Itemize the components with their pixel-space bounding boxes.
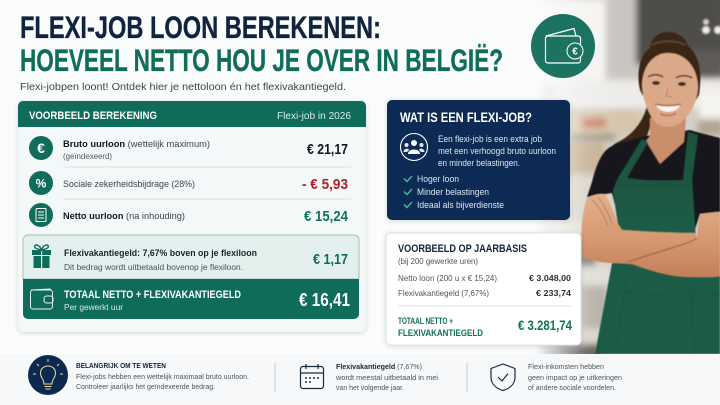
panel header: VOORBEELD BEREKENING: [29, 110, 157, 122]
ponytail: [607, 106, 652, 162]
footer item: flexi-inkomsten: Flexi-inkomsten hebben: [528, 362, 604, 371]
apron bib: [613, 132, 698, 240]
row: netto uurloon: Netto uurloon (na inhouding): [63, 211, 185, 222]
icon: shield: [491, 364, 515, 390]
footer item: flexivakantiegeld: wordt meestal uitbetaald in mei: [335, 373, 438, 382]
row: sociale zekerheidsbijdrage: - € 5,93: [302, 177, 348, 193]
footer item: flexivakantiegeld: van het volgende jaar.: [336, 383, 404, 392]
panel: voorbeeld op jaarbasis: (bij 200 gewerkte uren): [398, 257, 478, 266]
footer item: flexi-inkomsten: of andere sociale voordelen.: [528, 383, 616, 392]
footer item: flexi-inkomsten: geen impact op je uitkeringen: [528, 373, 622, 382]
checklist: Hoger loon: [417, 174, 459, 184]
panel: wat is een flexi-job: WAT IS EEN FLEXI-JOB?: [400, 110, 532, 125]
row: bruto uurloon: [29, 136, 348, 161]
footer item: flexivakantiegeld: Flexivakantiegeld (7,67%): [336, 362, 422, 371]
footer item: flexivakantiegeld: [300, 362, 438, 392]
icon: light bulb: [33, 359, 63, 389]
total: netto + flexivakantiegeld: TOTAAL NETTO + FLEXIVAKANTIEGELD: [64, 289, 241, 301]
panel: voorbeeld berekening: [18, 101, 366, 332]
panel: voorbeeld op jaarbasis: € 3.048,00: [529, 273, 571, 283]
footer item: belangrijk: [28, 355, 249, 395]
footer item: belangrijk: Flexi-jobs hebben een wettelijk maximaal bruto uurloon.: [76, 372, 249, 381]
panel: wat is een flexi-job: Een flexi-job is een extra job: [438, 134, 542, 144]
subtitle: Flexi-jobpen loont! Ontdek hier je nettoloon én het flexivakantiegeld.: [20, 81, 346, 93]
face: [642, 53, 698, 127]
shirt: [587, 130, 720, 232]
callout: flexivakantiegeld: Flexivakantiegeld: 7,67% boven op je flexiloon: [64, 248, 257, 259]
panel: voorbeeld op jaarbasis: € 233,74: [536, 288, 571, 298]
title: [20, 9, 503, 78]
total: netto + flexivakantiegeld: [23, 279, 359, 319]
footer item: belangrijk: Controleer jaarlijks het geïndexeerde bedrag.: [76, 382, 215, 391]
icon: gift: [32, 245, 51, 268]
panel: wat is een flexi-job: en minder belastingen.: [438, 158, 520, 168]
panel: voorbeeld op jaarbasis: VOORBEELD OP JAARBASIS: [398, 243, 527, 255]
row: netto uurloon: € 15,24: [304, 209, 348, 225]
row: bruto uurloon: € 21,17: [307, 142, 348, 158]
panel: wat is een flexi-job: met een verhoogd bruto uurloon: [438, 146, 556, 156]
row: netto uurloon: [29, 203, 348, 227]
neck: [646, 118, 686, 164]
icon: people: [400, 134, 428, 160]
panel: voorbeeld op jaarbasis: [386, 233, 581, 345]
panel: wat is een flexi-job: [387, 100, 570, 220]
callout: flexivakantiegeld: [23, 235, 359, 279]
footer item: belangrijk: BELANGRIJK OM TE WETEN: [76, 361, 166, 370]
title: HOEVEEL NETTO HOU JE OVER IN BELGIË?: [20, 42, 503, 78]
row: bruto uurloon: €: [37, 140, 45, 156]
callout: flexivakantiegeld: € 1,17: [313, 251, 348, 268]
facial features: [648, 75, 692, 78]
row: bruto uurloon: Bruto uurloon (wettelijk maximum): [63, 139, 210, 150]
checklist: [404, 174, 504, 210]
row: sociale zekerheidsbijdrage: [29, 171, 348, 195]
panel header: [18, 101, 366, 127]
total: netto + flexivakantiegeld: Per gewerkt uur: [64, 302, 123, 312]
arms: [581, 194, 720, 277]
icon: wallet badge: €: [572, 46, 578, 58]
panel: voorbeeld op jaarbasis: FLEXIVAKANTIEGELD: [398, 328, 483, 339]
photo: smiling shop worker in green apron: [538, 0, 720, 354]
row: sociale zekerheidsbijdrage: %: [36, 176, 47, 190]
hair: [638, 32, 700, 100]
icon: wallet: [30, 289, 53, 309]
panel: voorbeeld op jaarbasis: € 3.281,74: [518, 318, 572, 333]
callout: flexivakantiegeld: Dit bedrag wordt uitbetaald bovenop je flexiloon.: [64, 262, 243, 272]
icon: wallet badge: [531, 14, 595, 78]
footer strip: [0, 354, 720, 405]
panel: voorbeeld op jaarbasis: Netto loon (200 u x € 15,24): [398, 274, 497, 283]
panel header: Flexi-job in 2026: [277, 111, 351, 122]
row: sociale zekerheidsbijdrage: Sociale zekerheidsbijdrage (28%): [63, 179, 195, 190]
row: bruto uurloon: (geïndexeerd): [63, 152, 112, 161]
icon: calendar: [300, 364, 324, 388]
panel: voorbeeld op jaarbasis: Flexivakantiegeld (7,67%): [398, 289, 489, 298]
title: FLEXI-JOB LOON BEREKENEN:: [20, 9, 381, 45]
checklist: Ideaal als bijverdienste: [417, 200, 504, 210]
checklist: Minder belastingen: [417, 187, 489, 197]
apron skirt: [595, 258, 720, 354]
footer item: flexi-inkomsten: [491, 362, 622, 392]
panel: voorbeeld op jaarbasis: TOTAAL NETTO +: [398, 316, 453, 327]
total: netto + flexivakantiegeld: € 16,41: [299, 290, 350, 310]
